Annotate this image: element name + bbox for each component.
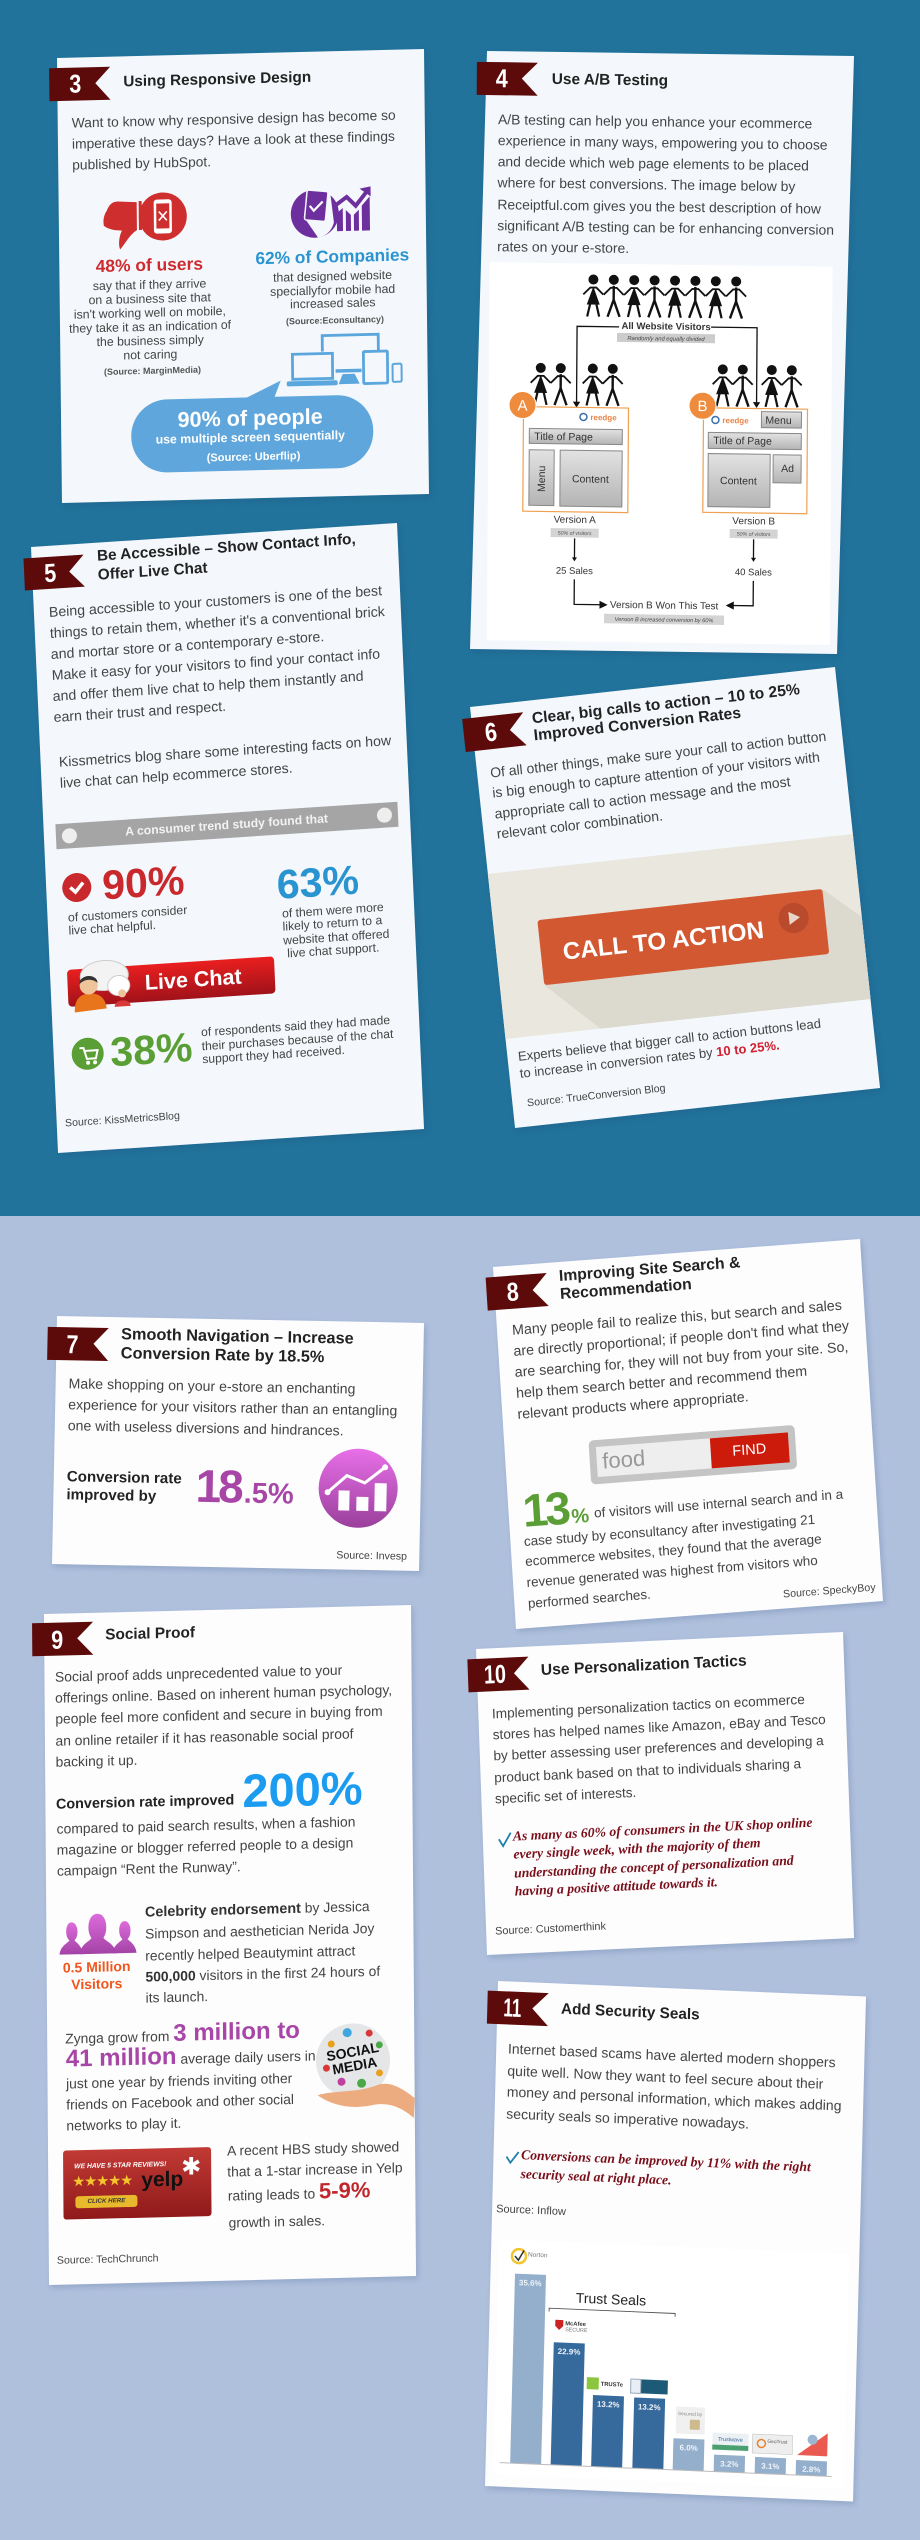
text: 62% detail bbox=[270, 268, 395, 312]
all visitors figures bbox=[583, 274, 746, 319]
source: Source: Inflow bbox=[496, 2203, 566, 2218]
label: version B won: Version B increased conversion by 60% bbox=[614, 617, 713, 624]
intro text: Of all other things, make sure your call to action button bbox=[489, 727, 827, 780]
text: zynga: Zynga grow from 3 million to bbox=[65, 2017, 300, 2047]
text: paid search bbox=[57, 1813, 355, 1878]
source: Source: SpeckyBoy bbox=[783, 1581, 876, 1601]
callout: conversions improved: security seal at right place. bbox=[520, 2166, 672, 2187]
seal: secured by bbox=[676, 2406, 705, 2435]
badge: B: B bbox=[697, 398, 707, 415]
label: conversion rate improved: Conversion rate improved bbox=[56, 1792, 234, 1813]
version A mockup: reedge bbox=[590, 413, 617, 422]
text: 90% detail bbox=[68, 903, 188, 938]
text: HBS study bbox=[227, 2136, 403, 2183]
stat: 90%: 90% bbox=[101, 857, 185, 908]
badge: yelp reviews: WE HAVE 5 STAR REVIEWS! bbox=[74, 2161, 166, 2170]
heading: Be Accessible – Show Contact Info, bbox=[97, 530, 356, 564]
label: all website visitors: Randomly and equally divided bbox=[627, 336, 705, 343]
text: kissmetrics bbox=[59, 732, 391, 791]
text: 38% detail: their purchases because of the chat bbox=[201, 1026, 394, 1053]
seal: secured by: Secured by bbox=[678, 2411, 703, 2418]
version B result: Version B bbox=[732, 516, 775, 528]
bar values: 3.1% bbox=[761, 2462, 780, 2471]
arrows to winner bbox=[574, 578, 753, 610]
ribbon: number 5: 5 bbox=[43, 557, 56, 588]
text: 48% detail bbox=[69, 276, 231, 362]
source: MarginMedia: (Source: MarginMedia) bbox=[104, 365, 201, 377]
ribbon: number 5 bbox=[24, 554, 85, 590]
text: case study: case study by econsultancy after investigating 21 bbox=[523, 1511, 815, 1548]
intro text: things to retain them, whether it's a conventional brick bbox=[50, 603, 385, 641]
text: paid search: campaign “Rent the Runway”. bbox=[57, 1858, 241, 1878]
button: call to action: CALL TO ACTION bbox=[562, 917, 765, 966]
intro text: and offer them live chat to help them instantly and bbox=[52, 668, 364, 704]
stat: 18.5%: 18.5% bbox=[195, 1460, 294, 1513]
icon: rising chart circle bbox=[318, 1448, 398, 1528]
seal: TRUSTe bbox=[587, 2377, 624, 2391]
search box: food / find: FIND bbox=[732, 1441, 767, 1460]
text: celebrity endorsement: Simpson and aesthetician Nerida Joy bbox=[145, 1920, 374, 1942]
intro text: Make shopping on your e-store an enchanting bbox=[69, 1375, 356, 1396]
version A mockup: Menu bbox=[535, 465, 548, 492]
label: 0.5 million visitors: Visitors bbox=[71, 1975, 122, 1992]
stat: 38%: 38% bbox=[109, 1024, 193, 1075]
panel: 4 use A/B testing bbox=[470, 51, 854, 654]
text: 48% detail: on a business site that bbox=[88, 290, 211, 307]
heading bbox=[97, 530, 356, 583]
callout: 60% of consumers: As many as 60% of consumers in the UK shop online bbox=[513, 1815, 813, 1844]
ribbon: number 9 bbox=[32, 1622, 94, 1656]
icon: thumbs down mobile bbox=[103, 192, 187, 250]
intro text: relevant products where appropriate. bbox=[517, 1390, 749, 1423]
icon: social media globe on hand: SOCIAL bbox=[325, 2039, 380, 2064]
intro text: specific set of interests. bbox=[495, 1785, 637, 1806]
intro text: appropriate call to action message and the most bbox=[494, 773, 791, 821]
badge: B bbox=[688, 392, 716, 419]
panel: 10 personalization bbox=[476, 1632, 854, 1955]
panel: 3 using responsive design bbox=[57, 49, 429, 503]
seal: Norton bbox=[512, 2249, 548, 2264]
intro text: is big enough to capture attention of your visitors with bbox=[491, 749, 821, 801]
source: Source: Invesp bbox=[336, 1549, 407, 1563]
heading bbox=[558, 1254, 741, 1303]
text: case study: ecommerce websites, they found that the average bbox=[525, 1532, 822, 1569]
intro text: money and personal information, which makes adding bbox=[507, 2084, 842, 2114]
text: experts believe: to increase in conversion rates by 10 to 25%. bbox=[519, 1037, 780, 1080]
text: friends bbox=[66, 2067, 294, 2137]
text: 5-9%: rating leads to 5-9% bbox=[228, 2177, 370, 2204]
intro text: and mortar store or a contemporary e-store. bbox=[50, 628, 325, 662]
intro text: Being accessible to your customers is one of the best bbox=[49, 582, 382, 620]
intro text bbox=[68, 1375, 397, 1439]
seal: red triangle bbox=[797, 2432, 828, 2456]
label: all website visitors: All Website Visitors bbox=[621, 321, 710, 333]
text: paid search: compared to paid search results, when a fashion bbox=[57, 1813, 355, 1836]
bar values: 35.6% bbox=[519, 2278, 542, 2288]
intro text bbox=[55, 1661, 392, 1770]
badge: A bbox=[508, 391, 536, 419]
intro text: Receiptful.com gives you the best description of how bbox=[497, 196, 821, 216]
heading: Clear, big calls to action – 10 to 25% bbox=[531, 681, 801, 727]
bar values: 3.2% bbox=[720, 2459, 739, 2469]
panel: 8 improving site search bbox=[493, 1239, 883, 1629]
text: friends: just one year by friends inviting other bbox=[66, 2070, 292, 2091]
intro text bbox=[49, 582, 385, 725]
label: 0.5 million visitors: 0.5 Million bbox=[63, 1958, 131, 1976]
icon: blue devices bbox=[286, 332, 403, 386]
label: 0.5 million visitors bbox=[37, 1957, 157, 1993]
intro text: and decide which web page elements to be placed bbox=[498, 153, 809, 174]
ribbon: number 7 bbox=[47, 1326, 109, 1361]
bar values: 13.2% bbox=[638, 2402, 661, 2412]
intro text: security seals so imperative nowadays. bbox=[506, 2105, 749, 2131]
ribbon: number 6: 6 bbox=[483, 717, 498, 748]
text: celebrity endorsement: its launch. bbox=[146, 1988, 208, 2006]
intro text: published by HubSpot. bbox=[72, 155, 211, 173]
version A result: 25 Sales bbox=[555, 566, 593, 577]
label: trust seals bracket bbox=[549, 2289, 676, 2317]
seal: Trustwave: Trustwave bbox=[718, 2437, 743, 2444]
bar values bbox=[514, 2278, 825, 2475]
text: experts believe: Experts believe that bigger call to action buttons lead bbox=[517, 1016, 822, 1064]
text: 38% detail bbox=[201, 1013, 394, 1067]
panel content wrapper bbox=[476, 62, 834, 644]
search box: food / find: food bbox=[602, 1445, 646, 1474]
text: 90% detail: live chat helpful. bbox=[68, 918, 156, 938]
intro text: Make it easy for your visitors to find your contact info bbox=[51, 645, 380, 683]
version B visitors bbox=[712, 364, 801, 407]
text: 63% detail: of them were more bbox=[282, 900, 384, 921]
bar values: 22.9% bbox=[558, 2347, 581, 2357]
search box: food / find bbox=[588, 1425, 797, 1485]
intro text: imperative these days? Have a look at these findings bbox=[72, 129, 395, 152]
intro text: an online retailer if it has reasonable social proof bbox=[55, 1725, 354, 1748]
text: paid search: magazine or blogger referred people to a design bbox=[57, 1834, 353, 1857]
ribbon: number 10 bbox=[467, 1656, 529, 1692]
text: kissmetrics: live chat can help ecommerce stores. bbox=[60, 760, 293, 791]
intro text bbox=[492, 1688, 828, 1809]
intro text: experience in many ways, empowering you to choose bbox=[498, 132, 828, 152]
icon: green cart bbox=[72, 1038, 104, 1070]
text: 63% detail: live chat support. bbox=[287, 940, 380, 960]
seal: McAfee bbox=[555, 2320, 588, 2334]
A/B test diagram bbox=[486, 262, 832, 645]
source: Source: TrueConversion Blog bbox=[526, 1082, 666, 1109]
text: case study bbox=[523, 1511, 822, 1611]
badge: yelp reviews: ★★★★★ bbox=[72, 2172, 132, 2190]
intro text: Want to know why responsive design has become so bbox=[72, 108, 396, 131]
text: HBS study: A recent HBS study showed bbox=[227, 2138, 399, 2159]
button: call to action bbox=[537, 889, 829, 985]
intro text: A/B testing can help you enhance your ecommerce bbox=[498, 111, 812, 131]
callout: 90% of people bbox=[131, 380, 374, 472]
text: 63% detail: likely to return to a bbox=[282, 913, 383, 934]
seal: Norton: Norton bbox=[528, 2252, 548, 2259]
version B mockup: reedge bbox=[722, 416, 749, 425]
seal: BBB bbox=[631, 2379, 668, 2395]
badge: yelp reviews bbox=[63, 2147, 212, 2219]
text: 48% detail: not caring bbox=[123, 347, 177, 362]
badge: yelp reviews: yelp bbox=[141, 2167, 183, 2191]
intro text bbox=[72, 108, 396, 173]
seal: Trustwave bbox=[712, 2432, 749, 2451]
ribbon: number 10: 10 bbox=[483, 1658, 506, 1689]
ribbon: number 9: 9 bbox=[51, 1624, 63, 1655]
label: version B won: Version B Won This Test bbox=[609, 600, 718, 612]
icon: purple mobile chart bbox=[290, 186, 371, 238]
ribbon: number 4 bbox=[476, 62, 538, 96]
label: trust seals bracket: Trust Seals bbox=[576, 2290, 646, 2309]
panel: 5 be accessible bbox=[31, 523, 424, 1153]
version A mockup: Content bbox=[571, 473, 608, 486]
heading bbox=[121, 1325, 354, 1366]
bar values: 13.2% bbox=[597, 2400, 620, 2410]
ribbon: number 7: 7 bbox=[66, 1329, 79, 1359]
intro text: product bank based on that to individuals sharing a bbox=[494, 1756, 801, 1785]
callout: 90% of people: 90% of people bbox=[177, 404, 323, 432]
text: 90% detail: of customers consider bbox=[68, 903, 188, 925]
intro text: Many people fail to realize this, but search and sales bbox=[512, 1298, 842, 1339]
text: 48% detail: isn't working well on mobile, bbox=[74, 304, 226, 321]
ribbon: number 3: 3 bbox=[69, 68, 81, 99]
version B mockup: Menu bbox=[765, 415, 791, 427]
callout: 60% of consumers: every single week, with the majority of them bbox=[513, 1836, 761, 1862]
text: 38% detail: support they had received. bbox=[202, 1043, 345, 1067]
heading: Improved Conversion Rates bbox=[533, 704, 742, 744]
callout: 90% of people: (Source: Uberflip) bbox=[207, 450, 301, 464]
icon: live chat agents bbox=[74, 960, 131, 1012]
version B result: 40 Sales bbox=[734, 567, 772, 579]
text: 48% detail: say that if they arrive bbox=[93, 276, 206, 293]
callout: 60% of consumers: having a positive attitude towards it. bbox=[515, 1874, 718, 1899]
text: 41 million: 41 million average daily users in bbox=[66, 2043, 316, 2073]
seal: McAfee: SECURE bbox=[565, 2327, 588, 2334]
label: all website visitors bbox=[616, 321, 715, 343]
icon: check mark bbox=[505, 2150, 519, 2164]
seal: GeoTrust bbox=[752, 2434, 793, 2455]
intro text: are searching for, they will not buy from your site. So, bbox=[514, 1340, 849, 1381]
stat: 62% of Companies: 62% of Companies bbox=[255, 244, 409, 268]
source: Source: TechChrunch bbox=[57, 2252, 159, 2267]
heading: Recommendation bbox=[560, 1276, 692, 1303]
icon: red check bbox=[62, 873, 92, 902]
badge: A: A bbox=[517, 398, 527, 415]
section background: teal bbox=[0, 0, 920, 1216]
intro text: experience for your visitors rather than an entangling bbox=[68, 1396, 397, 1418]
version B mockup: Title of Page bbox=[713, 435, 772, 448]
text: 48% detail: the business simply bbox=[96, 332, 204, 349]
text: 48% detail: they take it as an indication of bbox=[69, 318, 231, 335]
version A visitors bbox=[530, 363, 622, 406]
intro text: rates on your e-store. bbox=[497, 238, 629, 256]
intro text: significant A/B testing can be for enhancing conversion bbox=[497, 217, 834, 238]
text: 62% detail: that designed website bbox=[273, 268, 392, 285]
heading: Use Personalization Tactics bbox=[541, 1652, 747, 1679]
icon: visitors people bbox=[59, 1913, 136, 1955]
text: celebrity endorsement bbox=[145, 1896, 380, 2009]
intro text: by better assessing user preferences and developing a bbox=[493, 1733, 824, 1764]
label: conversion rate improved by: Conversion rate bbox=[67, 1468, 182, 1487]
intro text bbox=[506, 2038, 843, 2139]
panel: 7 smooth navigation bbox=[52, 1316, 424, 1571]
intro text: earn their trust and respect. bbox=[53, 698, 226, 725]
panel: 11 security seals bbox=[485, 1981, 866, 2501]
seal: TRUSTe: TRUSTe bbox=[601, 2382, 624, 2389]
banner: consumer trend study: A consumer trend study found that bbox=[125, 811, 328, 839]
heading: Offer Live Chat bbox=[97, 559, 208, 583]
seal: GeoTrust: GeoTrust bbox=[767, 2439, 788, 2446]
text: celebrity endorsement: Celebrity endorsement by Jessica bbox=[145, 1898, 370, 1921]
intro text: stores has helped names like Amazon, eBay and Tesco bbox=[492, 1712, 826, 1743]
stat: 200%: 200% bbox=[242, 1761, 363, 1817]
version A result bbox=[550, 515, 598, 577]
text: 63% detail: website that offered bbox=[283, 926, 390, 947]
intro text: relevant color combination. bbox=[496, 808, 664, 842]
intro text bbox=[512, 1298, 850, 1423]
text: 63% detail bbox=[282, 900, 390, 960]
label: conversion rate improved by: improved by bbox=[66, 1487, 156, 1505]
ribbon: number 3 bbox=[49, 66, 110, 102]
intro text: quite well. Now they want to feel secure about their bbox=[507, 2062, 824, 2091]
icon: social media globe on hand: MEDIA bbox=[331, 2054, 378, 2077]
badge: yelp reviews: ✱ bbox=[181, 2153, 201, 2180]
label: conversion rate improved by bbox=[66, 1468, 182, 1505]
text: case study: revenue generated was highest from visitors who bbox=[526, 1553, 818, 1590]
callout: 60% of consumers bbox=[512, 1814, 815, 1901]
intro text: backing it up. bbox=[56, 1752, 138, 1770]
label: version B won bbox=[604, 600, 724, 625]
button: live chat: Live Chat bbox=[144, 965, 242, 995]
version B mockup: Ad bbox=[781, 463, 794, 475]
bars bbox=[500, 2273, 837, 2477]
intro text: where for best conversions. The image below by bbox=[498, 175, 795, 195]
intro text: Internet based scams have alerted modern shoppers bbox=[508, 2040, 836, 2070]
intro text: help them search better and recommend them bbox=[516, 1364, 808, 1402]
intro text: Implementing personalization tactics on ecommerce bbox=[492, 1692, 805, 1721]
ribbon: number 6 bbox=[462, 712, 527, 752]
heading: Using Responsive Design bbox=[123, 69, 311, 90]
image panel: call to action bbox=[488, 834, 870, 1039]
heading: Social Proof bbox=[105, 1624, 195, 1643]
bar values: 2.8% bbox=[802, 2465, 821, 2475]
callout: conversions improved: Conversions can be improved by 11% with the right bbox=[521, 2147, 811, 2174]
source: Econsultancy: (Source:Econsultancy) bbox=[286, 314, 384, 326]
text: growth in sales: growth in sales. bbox=[229, 2212, 325, 2231]
stat: 13%: 13% bbox=[521, 1481, 590, 1537]
intro text: offerings online. Based on inherent human psychology, bbox=[55, 1681, 392, 1706]
text: celebrity endorsement: recently helped Beautymint attract bbox=[145, 1942, 355, 1963]
panel: 6 clear big calls to action bbox=[470, 667, 880, 1128]
heading: Add Security Seals bbox=[561, 2001, 700, 2023]
panel: 9 social proof bbox=[44, 1605, 416, 2285]
version A mockup: Title of Page bbox=[534, 431, 593, 444]
intro text bbox=[489, 727, 827, 842]
ribbon: number 11: 11 bbox=[503, 1992, 522, 2023]
source: Source: KissMetricsBlog bbox=[65, 1110, 180, 1129]
text: HBS study: that a 1-star increase in Yelp bbox=[227, 2160, 403, 2180]
ribbon: number 4: 4 bbox=[496, 63, 508, 93]
intro text: people feel more confident and secure in buying from bbox=[55, 1703, 383, 1727]
text: 62% detail: speciallyfor mobile had bbox=[270, 281, 395, 299]
ribbon: number 11 bbox=[487, 1991, 549, 2026]
version A result: Version A bbox=[553, 515, 596, 526]
version A result: 50% of visitors bbox=[557, 531, 591, 537]
icon: social media globe on hand bbox=[317, 2022, 415, 2120]
text: case study: performed searches. bbox=[527, 1586, 651, 1611]
intro text bbox=[497, 111, 834, 256]
stat: 63%: 63% bbox=[276, 857, 360, 908]
text: 13% detail: of visitors will use internal search and in a bbox=[594, 1486, 844, 1520]
icon: check mark bbox=[498, 1832, 513, 1847]
text: 62% detail: increased sales bbox=[290, 296, 376, 312]
version B mockup bbox=[702, 408, 807, 514]
badge: yelp reviews: CLICK HERE bbox=[87, 2197, 125, 2205]
text: friends: networks to play it. bbox=[66, 2115, 181, 2133]
bar values: 6.0% bbox=[679, 2443, 698, 2453]
callout: 90% of people: use multiple screen sequentially bbox=[156, 428, 345, 447]
ribbon: number 8: 8 bbox=[506, 1276, 520, 1307]
callout: 60% of consumers: understanding the concept of personalization and bbox=[514, 1852, 794, 1880]
intro text: are directly proportional; if people don't find what they bbox=[513, 1318, 850, 1360]
intro text: Social proof adds unprecedented value to your bbox=[55, 1661, 342, 1684]
source: Source: Customerthink bbox=[495, 1920, 606, 1937]
version B mockup: Content bbox=[719, 475, 756, 488]
seal: McAfee: McAfee bbox=[565, 2321, 587, 2328]
text: kissmetrics: Kissmetrics blog share some interesting facts on how bbox=[59, 732, 391, 770]
version B result: 50% of visitors bbox=[736, 532, 770, 538]
text: 38% detail: of respondents said they had made bbox=[201, 1013, 390, 1039]
text: friends: friends on Facebook and other social bbox=[66, 2091, 294, 2112]
ribbon: number 8 bbox=[486, 1273, 549, 1311]
arrows from visitors to versions bbox=[574, 325, 759, 409]
version B result bbox=[729, 516, 777, 579]
callout: conversions improved bbox=[520, 2146, 811, 2196]
text: celebrity endorsement: 500,000 visitors in the first 24 hours of bbox=[145, 1963, 380, 1984]
heading: Improving Site Search & bbox=[558, 1254, 741, 1285]
version A mockup bbox=[522, 407, 628, 513]
heading: Smooth Navigation – Increase bbox=[121, 1325, 354, 1348]
button: live chat bbox=[67, 957, 276, 1007]
heading: Conversion Rate by 18.5% bbox=[121, 1344, 325, 1366]
banner: consumer trend study bbox=[55, 802, 398, 849]
heading: Use A/B Testing bbox=[552, 70, 668, 89]
chart panel bbox=[493, 2239, 849, 2489]
bar chart: trust seals bbox=[485, 1981, 866, 2501]
intro text: one with useless diversions and hindrances. bbox=[68, 1417, 344, 1439]
stat: 48% of users: 48% of users bbox=[96, 253, 203, 276]
